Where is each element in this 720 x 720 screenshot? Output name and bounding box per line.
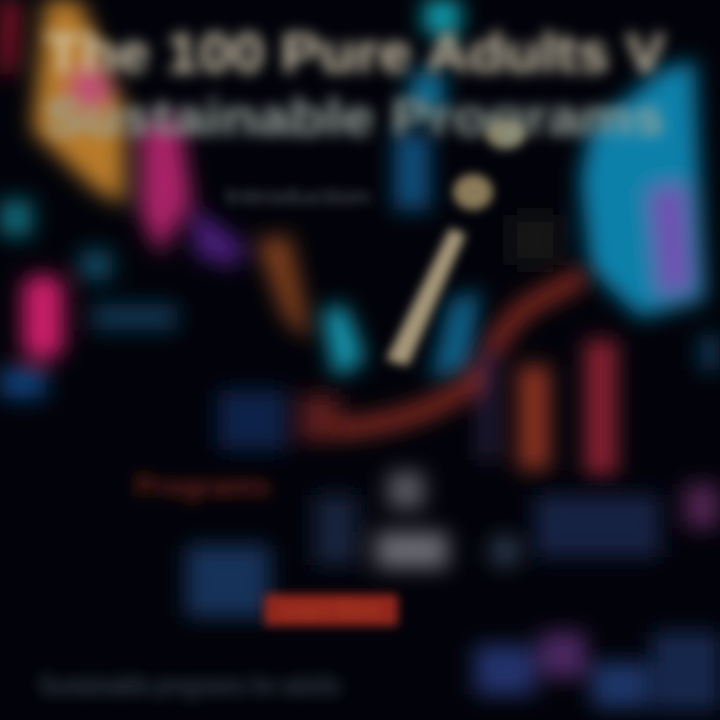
pen illustration	[386, 119, 525, 366]
subtitle: Introduction	[225, 184, 370, 209]
red label: Programs	[135, 470, 270, 503]
lower data blocks	[186, 472, 720, 617]
rising trend line and bars	[218, 275, 617, 475]
button	[264, 594, 398, 626]
left decorative ribbon	[0, 0, 312, 398]
bottom right decorative panel	[475, 632, 720, 710]
title: The 100 Pure Adults V	[45, 21, 665, 84]
central and right decorative columns	[322, 0, 720, 380]
title	[45, 21, 665, 147]
footer text: Sustainable programs for adults	[40, 670, 340, 700]
title: Sustainable Programs	[45, 89, 665, 147]
button: Learn More	[282, 600, 380, 620]
